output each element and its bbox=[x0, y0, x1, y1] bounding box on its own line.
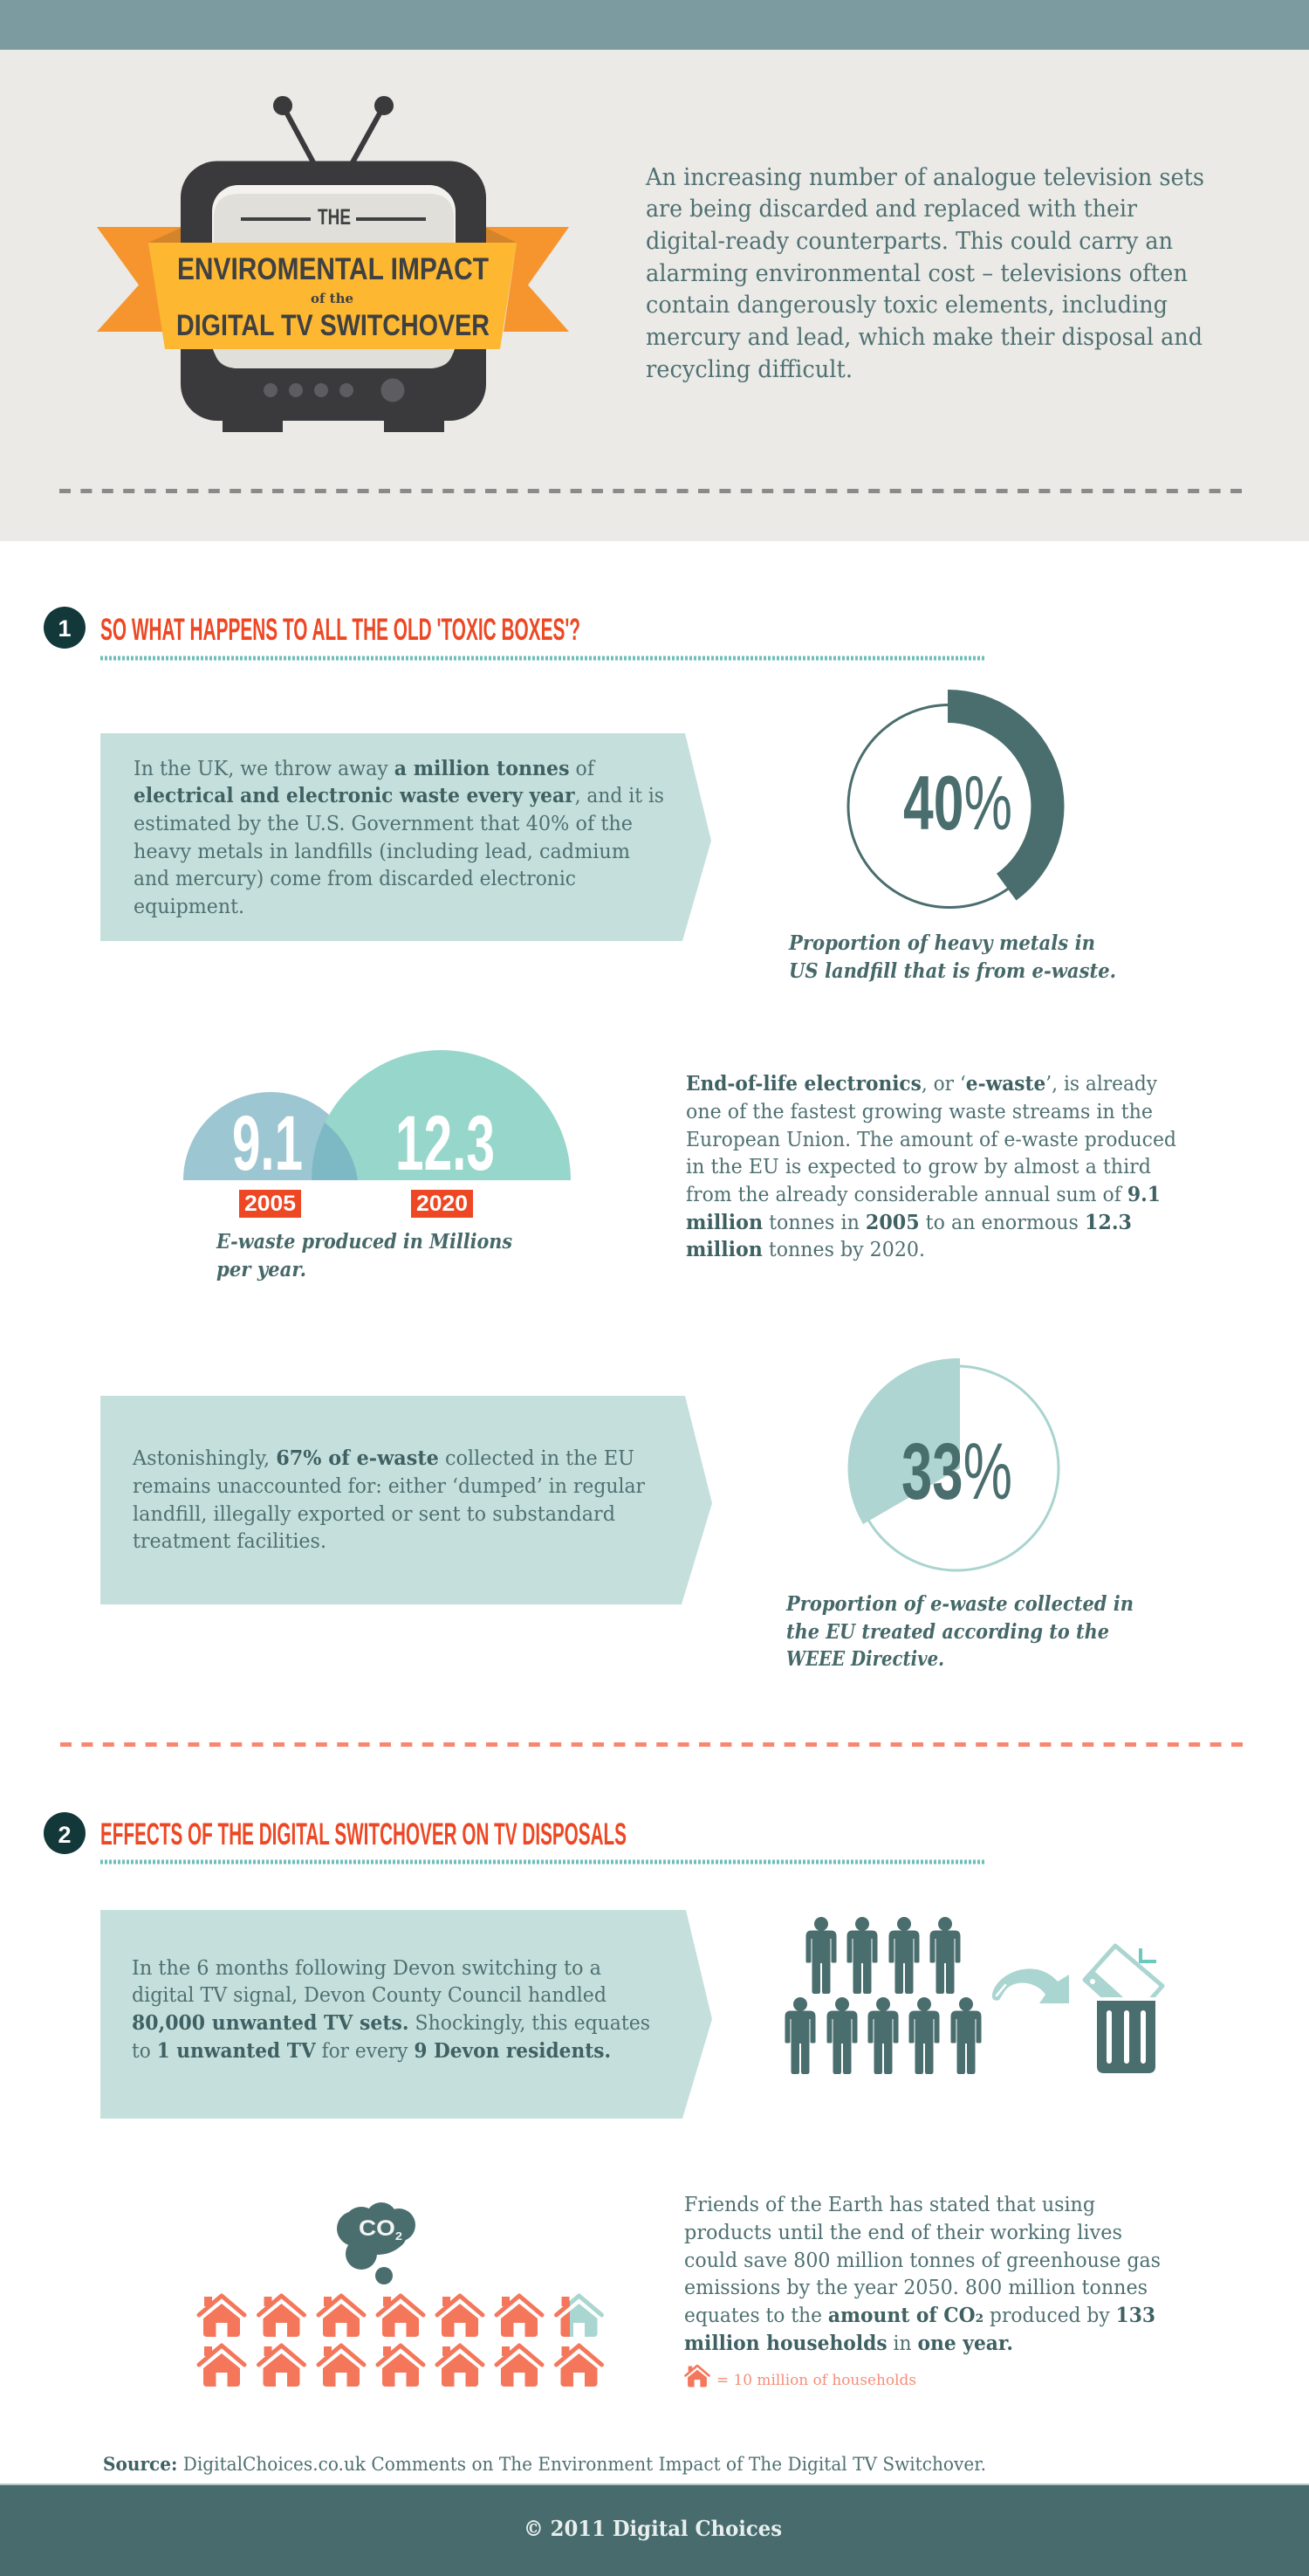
caption: 33%: the EU treated according to the bbox=[786, 1620, 1109, 1644]
antennas bbox=[274, 96, 393, 162]
panel text: Astonishingly, 67% of e-waste collected in the EU bbox=[132, 1446, 634, 1470]
text: end-of-life electronics: European Union. The amount of e-waste produced bbox=[686, 1129, 1176, 1151]
chart: 40% donut bbox=[848, 690, 1065, 908]
text: end-of-life electronics: End-of-life electronics, or ‘e-waste’, is already bbox=[686, 1072, 1157, 1096]
text: Friends of the Earth: could save 800 million tonnes of greenhouse gas bbox=[684, 2250, 1161, 2272]
panel text: and mercury) come from discarded electronic bbox=[134, 868, 576, 890]
intro text: mercury and lead, which make their disposal and bbox=[646, 324, 1203, 351]
arrow: to the bin bbox=[992, 1968, 1069, 2003]
panel text bbox=[132, 1957, 650, 2063]
caption: e-waste: E-waste produced in Millions bbox=[216, 1230, 512, 1254]
year label 2020 bbox=[411, 1190, 473, 1218]
chart: e-waste semicircles bbox=[183, 1050, 571, 1218]
number badge bbox=[44, 607, 86, 649]
intro text: recycling difficult. bbox=[646, 356, 853, 383]
caption: 40%: Proportion of heavy metals in bbox=[788, 931, 1095, 955]
chart: 33% pie: 33% bbox=[901, 1427, 1012, 1516]
intro text: digital-ready counterparts. This could carry an bbox=[646, 228, 1173, 255]
title: DIGITAL TV SWITCHOVER bbox=[176, 309, 490, 342]
panel text bbox=[132, 1446, 645, 1553]
icon: household grid bbox=[199, 2287, 622, 2387]
text: end-of-life electronics bbox=[686, 1072, 1176, 1261]
panel text: electrical and electronic waste every year, and it is bbox=[134, 784, 664, 807]
bin bbox=[1097, 2001, 1155, 2073]
footer: © 2011 Digital Choices bbox=[524, 2516, 782, 2541]
intro text: are being discarded and replaced with their bbox=[646, 196, 1137, 223]
panel text: digital TV signal, Devon County Council handled bbox=[132, 1984, 607, 2007]
section 2 heading bbox=[44, 1812, 985, 1862]
ribbon tails bbox=[97, 227, 569, 332]
panel text: treatment facilities. bbox=[133, 1530, 326, 1553]
panel text: estimated by the U.S. Government that 40% of the bbox=[134, 813, 633, 835]
title: ENVIROMENTAL IMPACT bbox=[177, 252, 489, 286]
text: Friends of the Earth bbox=[684, 2194, 1161, 2355]
panel text: landfill, illegally exported or sent to substandard bbox=[133, 1503, 615, 1526]
title bbox=[176, 205, 490, 342]
tv body bbox=[181, 161, 486, 432]
text: end-of-life electronics: in the EU is expected to grow by almost a third bbox=[686, 1156, 1151, 1178]
panel: 67% unaccounted bbox=[100, 1396, 712, 1604]
section 1 heading bbox=[44, 607, 985, 658]
heading text: SO WHAT HAPPENS TO ALL THE OLD 'TOXIC BOXES'? bbox=[100, 613, 580, 647]
chart: 40% donut: 40% bbox=[903, 759, 1012, 846]
number badge bbox=[44, 1812, 86, 1854]
heading text: EFFECTS OF THE DIGITAL SWITCHOVER ON TV DISPOSALS bbox=[100, 1817, 627, 1851]
panel text: equipment. bbox=[134, 896, 244, 918]
caption: 33%: WEEE Directive. bbox=[786, 1647, 944, 1671]
footer bbox=[0, 2483, 1309, 2576]
text: end-of-life electronics: one of the fastest growing waste streams in the bbox=[686, 1101, 1153, 1123]
text: Friends of the Earth: products until the end of their working lives bbox=[684, 2222, 1122, 2244]
chart: 33% pie bbox=[848, 1358, 1059, 1570]
legend: house equals 10 million: = 10 million of households bbox=[716, 2372, 916, 2389]
title: of the bbox=[311, 291, 353, 306]
caption: 33% bbox=[785, 1592, 1134, 1671]
intro text: contain dangerously toxic elements, including bbox=[646, 292, 1168, 319]
panel text: heavy metals in landfills (including lead, cadmium bbox=[134, 841, 630, 863]
screen bbox=[212, 185, 456, 368]
intro text bbox=[645, 164, 1204, 383]
icon: TV in bin bbox=[1085, 1946, 1162, 2073]
caption: e-waste: per year. bbox=[216, 1258, 306, 1281]
number badge: 2 bbox=[58, 1822, 72, 1848]
icon: television with title ribbon bbox=[97, 96, 569, 432]
text: Friends of the Earth: Friends of the Earth has stated that using bbox=[684, 2194, 1095, 2216]
chart: e-waste semicircles: 12.3 bbox=[395, 1099, 495, 1186]
top band bbox=[0, 0, 1309, 50]
header panel bbox=[0, 50, 1309, 541]
panel: UK e-waste bbox=[100, 733, 711, 941]
icon: CO2 cloud bbox=[337, 2202, 415, 2284]
text: end-of-life electronics: from the already considerable annual sum of 9.1 bbox=[686, 1183, 1161, 1206]
intro text: alarming environmental cost – televisions often bbox=[646, 260, 1188, 287]
panel text: In the 6 months following Devon switching to a bbox=[132, 1957, 601, 1980]
panel text: remains unaccounted for: either ‘dumped’ in regular bbox=[133, 1475, 645, 1498]
panel text: to 1 unwanted TV for every 9 Devon residents. bbox=[132, 2039, 611, 2063]
panel text: In the UK, we throw away a million tonnes of bbox=[134, 757, 595, 780]
text: Friends of the Earth: equates to the amount of CO₂ produced by 133 bbox=[684, 2304, 1155, 2327]
panel: Devon bbox=[100, 1910, 712, 2119]
control buttons bbox=[264, 379, 405, 402]
year label 2020: 2020 bbox=[416, 1192, 468, 1216]
year label 2005 bbox=[239, 1190, 301, 1218]
intro text: An increasing number of analogue television sets bbox=[645, 164, 1204, 191]
text: end-of-life electronics: million tonnes by 2020. bbox=[686, 1238, 925, 1261]
caption: 33%: Proportion of e-waste collected in bbox=[785, 1592, 1134, 1616]
panel text bbox=[134, 757, 664, 918]
chart: e-waste semicircles: 9.1 bbox=[232, 1099, 303, 1186]
tilted tv bbox=[1082, 1943, 1164, 1997]
caption: 40%: US landfill that is from e-waste. bbox=[789, 959, 1116, 983]
caption: e-waste bbox=[216, 1230, 512, 1281]
icon: CO2 cloud: 2 bbox=[395, 2229, 402, 2243]
ribbon banner bbox=[148, 243, 517, 349]
text: Friends of the Earth: million households in one year. bbox=[684, 2332, 1013, 2355]
icon: nine people bbox=[785, 1917, 981, 2074]
text: Friends of the Earth: emissions by the year 2050. 800 million tonnes bbox=[684, 2277, 1148, 2299]
number badge: 1 bbox=[58, 615, 72, 642]
legend: house equals 10 million bbox=[685, 2366, 916, 2389]
title: THE bbox=[318, 205, 351, 230]
panel text: 80,000 unwanted TV sets. Shockingly, this equates bbox=[132, 2011, 650, 2035]
icon: CO2 cloud: CO bbox=[359, 2216, 391, 2241]
caption: 40% bbox=[788, 931, 1116, 983]
text: end-of-life electronics: million tonnes in 2005 to an enormous 12.3 bbox=[686, 1211, 1132, 1234]
year label 2005: 2005 bbox=[244, 1192, 296, 1216]
source line: Source: DigitalChoices.co.uk Comments on The Environment Impact of The Digital TV Switchover. bbox=[103, 2453, 986, 2475]
